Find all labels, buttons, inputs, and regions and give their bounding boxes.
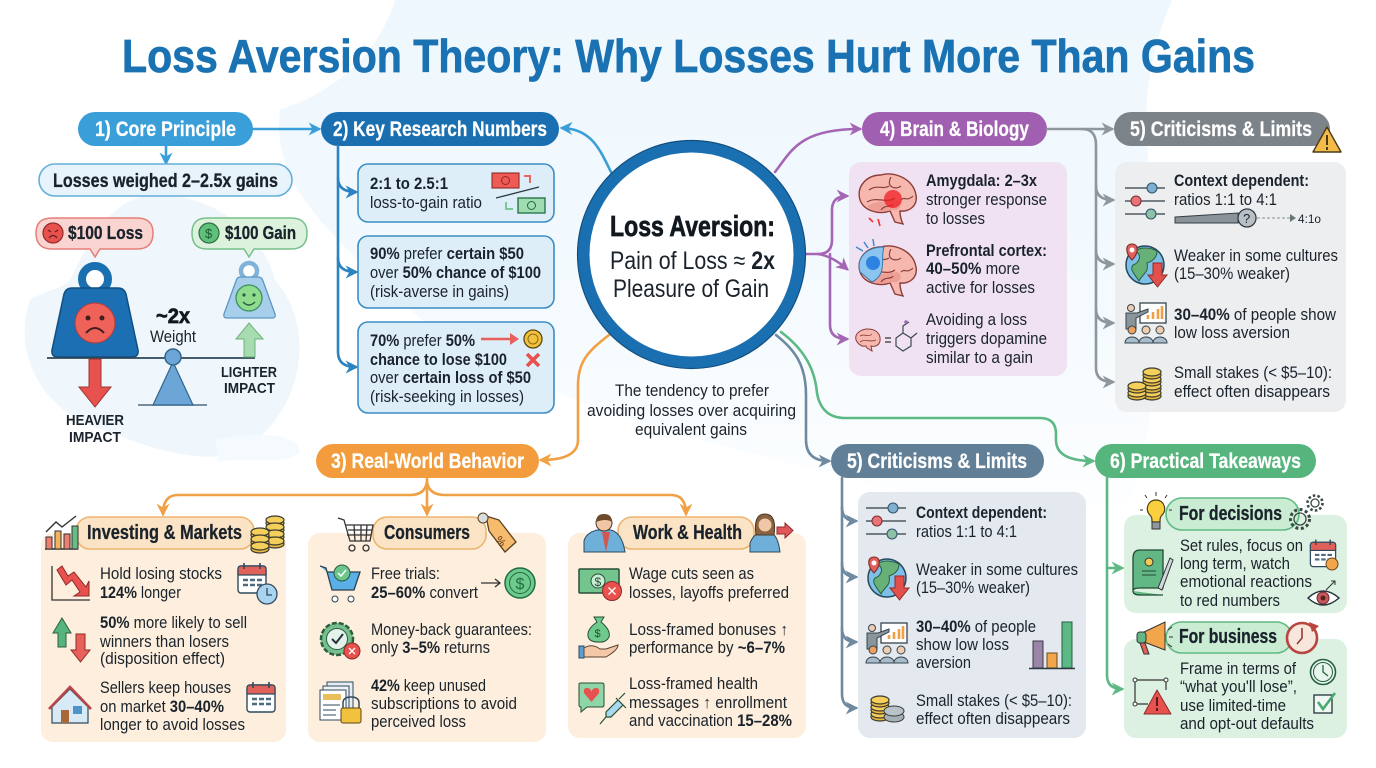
text: heavier impact <box>66 412 124 446</box>
pill: key research numbers: 2) Key Research Numbers <box>333 118 547 141</box>
panel: research box risk-seeking: (risk-seeking in losses) <box>370 388 524 406</box>
panel: investing and markets: (disposition effect) <box>100 650 225 668</box>
panel: investing and markets: on market 30–40% <box>100 698 224 716</box>
panel: research box risk-seeking <box>358 322 554 413</box>
icon: sliders <box>866 503 906 539</box>
icon: stopwatch <box>1287 622 1319 653</box>
panel: criticisms and limits top: effect often disappears <box>1174 383 1330 401</box>
panel: work and health: Loss-framed health <box>629 675 758 693</box>
panel: consumers: Free trials: <box>371 565 440 583</box>
icon: ratio gauge: ? <box>1243 211 1250 226</box>
panel: brain and biology: active for losses <box>926 279 1035 297</box>
icon: brain equals molecule <box>856 320 917 351</box>
panel: brain and biology: stronger response <box>926 191 1047 209</box>
icon: full cart with check <box>320 565 360 602</box>
icon: gears <box>1290 496 1322 528</box>
center circle: loss aversion: Pleasure of Gain <box>613 275 769 303</box>
icon: arrow to dollar coin: $ <box>516 576 524 593</box>
pill: brain and biology <box>862 112 1047 146</box>
panel: investing and markets: 124% longer <box>100 584 181 602</box>
icon: megaphone <box>1137 622 1173 654</box>
sub-heading: work and health <box>618 517 754 549</box>
panel: consumers <box>308 513 546 742</box>
panel: brain and biology: Prefrontal cortex: <box>926 242 1047 260</box>
icon: coins <box>1128 368 1161 400</box>
center circle: loss aversion: Pain of Loss ≈ 2x <box>610 247 775 275</box>
title: Loss Aversion Theory: Why Losses Hurt More Than Gains <box>122 30 1255 82</box>
connectors: research numbers branches <box>338 146 356 367</box>
panel: for business <box>1124 622 1347 738</box>
text: ~2x weight <box>150 305 196 346</box>
connector: core principle to research numbers <box>166 128 611 172</box>
sub-heading: consumers: Consumers <box>384 522 470 544</box>
icon: brain prefrontal <box>856 239 916 296</box>
panel: investing and markets: 50% more likely to sell <box>100 614 247 632</box>
panel: criticisms and limits lower: aversion <box>916 654 971 672</box>
panel: criticisms and limits top: ratios 1:1 to 4:1 <box>1174 191 1277 209</box>
panel: brain and biology: similar to a gain <box>926 349 1033 367</box>
up arrow lighter impact <box>236 323 263 357</box>
callout: losses weighed <box>39 164 292 196</box>
panel: brain and biology: triggers dopamine <box>926 330 1047 348</box>
panel: criticisms and limits top: 30–40% of people show <box>1174 306 1336 324</box>
bubble: $100 loss <box>36 218 153 257</box>
icon: house <box>49 687 91 723</box>
pill: core principle <box>78 112 253 146</box>
icon: shopping cart <box>338 518 373 551</box>
icon: coins <box>871 696 904 722</box>
icon: presenter <box>866 623 908 663</box>
sub-heading: for decisions: For decisions <box>1179 503 1282 525</box>
text: ~2x weight: Weight <box>150 328 196 346</box>
sub-heading: investing <box>76 517 254 549</box>
pill: brain and biology: 4) Brain & Biology <box>880 118 1029 141</box>
connectors: behavior tree <box>163 478 686 514</box>
panel: research box ratio <box>358 164 554 222</box>
bubble: $100 gain: $ <box>205 226 213 241</box>
icon: globe <box>1126 244 1167 287</box>
panel: criticisms and limits lower: effect often disappears <box>916 710 1070 728</box>
center circle: loss aversion: Loss Aversion: <box>610 211 775 243</box>
icon: brain amygdala <box>859 174 916 226</box>
pill: core principle: 1) Core Principle <box>95 118 236 141</box>
panel: consumers: 42% keep unused <box>371 677 486 695</box>
icon: guarantee badge <box>321 623 360 659</box>
icon: light bulb <box>1140 492 1172 529</box>
text: definition: The tendency to prefer <box>615 382 769 400</box>
text: lighter impact <box>221 364 277 397</box>
connectors: center to behavior, criticisms, takeaways <box>541 332 1093 461</box>
panel: for decisions: to red numbers <box>1180 592 1280 610</box>
connectors: criticisms lower branches <box>842 478 856 708</box>
pill: practical takeaways: 6) Practical Takeaways <box>1110 450 1301 473</box>
icon: price tag: % <box>492 534 508 550</box>
icon: price tag <box>478 513 516 552</box>
panel: investing and markets: winners than losers <box>99 633 229 651</box>
bubble: $100 gain <box>192 218 307 257</box>
icon: ratio gauge: 4:1o <box>1298 212 1321 226</box>
callout: losses weighed: Losses weighed 2–2.5x gains <box>53 171 278 192</box>
panel: criticisms and limits lower: Context dependent: <box>916 504 1047 522</box>
pill: criticisms and limits lower: 5) Criticisms & Limits <box>847 450 1027 473</box>
panel: research box ratio: 2:1 to 2.5:1 <box>370 175 448 193</box>
panel: work and health: losses, layoffs preferred <box>629 584 789 602</box>
panel: for decisions: long term, watch <box>1180 555 1290 573</box>
panel: for decisions <box>1124 492 1347 613</box>
panel: brain and biology: Amygdala: 2–3x <box>926 172 1038 190</box>
icon: frame with warning <box>1133 678 1171 714</box>
panel: criticisms and limits top: Weaker in some cultures <box>1174 247 1338 265</box>
bar chart <box>1029 622 1075 668</box>
center circle: loss aversion <box>578 140 806 368</box>
sub-heading: consumers <box>373 517 486 549</box>
bubble: $100 loss: $100 Loss <box>68 223 143 243</box>
panel: investing and markets: Sellers keep houses <box>100 679 231 697</box>
panel: consumers: perceived loss <box>371 713 466 731</box>
text: definition: avoiding losses over acquiring <box>587 402 796 420</box>
panel: investing and markets <box>41 516 286 742</box>
panel: criticisms and limits lower: Small stakes (< $5–10): <box>916 692 1072 710</box>
icon: health message and syringe <box>579 683 626 724</box>
bubble: $100 gain: $100 Gain <box>225 223 296 243</box>
panel: brain and biology: 40–50% more <box>926 260 1020 278</box>
icon: ratio gauge <box>1175 209 1321 227</box>
pill: real-world behavior <box>316 444 539 478</box>
icon: money bag on hand <box>579 617 618 658</box>
pill: criticisms and limits top <box>1114 112 1341 152</box>
panel: consumers: subscriptions to avoid <box>371 695 517 713</box>
panel: work and health <box>568 514 806 738</box>
icon: money bag on hand: $ <box>594 628 601 640</box>
icon: globe <box>868 557 909 600</box>
panel: investing and markets: longer to avoid losses <box>100 716 245 734</box>
icon: balance scale with weights <box>47 263 277 446</box>
text: heavier impact: IMPACT <box>69 429 121 446</box>
panel: criticisms and limits lower: Weaker in some cultures <box>916 561 1078 579</box>
pill: real-world behavior: 3) Real-World Behavior <box>331 450 524 473</box>
panel: research box risk-seeking: over certain loss of $50 <box>370 369 531 387</box>
panel: for business: “what you'll lose”, <box>1180 678 1297 696</box>
beam and pivot <box>47 349 255 405</box>
panel: investing and markets: Hold losing stocks <box>100 565 222 583</box>
panel: research box certain gains: over 50% chance of $100 <box>370 264 541 282</box>
text: definition: equivalent gains <box>635 421 747 439</box>
panel: for business: Frame in terms of <box>1180 660 1296 678</box>
pill: practical takeaways <box>1095 444 1316 478</box>
text: ~2x weight: ~2x <box>156 305 190 328</box>
icon: arrow to dollar coin <box>481 568 535 598</box>
connectors: center to brain <box>775 129 860 339</box>
pill: criticisms and limits top: 5) Criticisms & Limits <box>1130 118 1312 141</box>
text: lighter impact: IMPACT <box>224 380 275 397</box>
icon: up and down arrows <box>53 618 90 662</box>
panel: for business: and opt-out defaults <box>1180 715 1314 733</box>
icon: falling chart <box>52 566 90 600</box>
icon: arrow, coin and cross <box>481 330 542 366</box>
panel: work and health: performance by ~6–7% <box>629 639 785 657</box>
panel: criticisms and limits top: Small stakes (< $5–10): <box>1174 364 1332 382</box>
down arrow heavier impact <box>79 359 111 407</box>
sub-heading: for decisions <box>1166 498 1299 530</box>
sub-heading: for business <box>1166 622 1292 653</box>
icon: calendar and clock <box>1310 540 1338 570</box>
text: definition <box>587 382 796 439</box>
panel: for decisions: Set rules, focus on <box>1180 537 1303 555</box>
panel: research box ratio: loss-to-gain ratio <box>370 194 482 212</box>
panel: work and health: and vaccination 15–28% <box>629 712 792 730</box>
panel: criticisms and limits lower <box>858 492 1086 738</box>
panel: criticisms and limits top: Context dependent: <box>1174 172 1309 190</box>
pill: criticisms and limits lower <box>831 444 1044 478</box>
panel: criticisms and limits top: low loss aversion <box>1174 324 1290 342</box>
panel: criticisms and limits lower: (15–30% weaker) <box>916 579 1030 597</box>
icon: woman with arrow <box>750 514 793 552</box>
text: heavier impact: HEAVIER <box>66 412 124 429</box>
icon: banknote with cross: $ <box>594 575 602 589</box>
connectors: takeaways branches <box>1107 478 1122 689</box>
icon: sliders <box>1125 183 1165 219</box>
sub-heading: investing: Investing & Markets <box>87 522 242 544</box>
panel: consumers: Money-back guarantees: <box>371 621 532 639</box>
icon: warning triangle <box>1313 127 1341 152</box>
icon: businessman <box>584 514 625 552</box>
icon: calendar with clock <box>238 563 277 604</box>
panel: criticisms and limits lower: 30–40% of people <box>916 618 1036 636</box>
heavy weight with sad face <box>52 266 138 357</box>
icon: documents with lock <box>320 682 361 723</box>
panel: for decisions: emotional reactions <box>1180 573 1312 591</box>
panel: brain and biology <box>849 162 1067 376</box>
panel: for business: use limited-time <box>1180 697 1286 715</box>
icon: banknote with cross <box>579 569 622 600</box>
pill: key research numbers <box>321 112 559 146</box>
panel: research box risk-seeking: chance to lose $100 <box>370 351 507 369</box>
icon: presenter <box>1125 303 1167 343</box>
icon: calendar <box>247 682 275 712</box>
icon: notebook and pen <box>1133 550 1173 595</box>
panel: research box certain gains <box>358 236 554 308</box>
panel: research box certain gains: (risk-averse in gains) <box>370 283 509 301</box>
icon: eye <box>1308 581 1339 605</box>
icon: money ratio <box>492 173 545 213</box>
panel: work and health: messages ↑ enrollment <box>629 694 787 712</box>
text: lighter impact: LIGHTER <box>221 364 277 381</box>
panel: criticisms and limits top <box>1115 162 1346 412</box>
panel: consumers: only 3–5% returns <box>371 639 490 657</box>
panel: criticisms and limits lower: show low loss <box>916 636 1009 654</box>
sub-heading: work and health: Work & Health <box>633 522 742 544</box>
connectors: brain to criticisms top <box>1047 129 1113 382</box>
panel: brain and biology: to losses <box>926 210 985 228</box>
panel: work and health: Wage cuts seen as <box>629 565 754 583</box>
icon: checkbox <box>1314 693 1335 713</box>
panel: criticisms and limits lower: ratios 1:1 to 4:1 <box>916 523 1017 541</box>
panel: research box risk-seeking: 70% prefer 50% <box>370 332 475 350</box>
sub-heading: for business: For business <box>1179 626 1277 648</box>
panel: brain and biology: Avoiding a loss <box>926 311 1027 329</box>
icon: clock <box>1310 660 1336 684</box>
light weight with happy face <box>224 263 275 318</box>
panel: criticisms and limits top: (15–30% weaker) <box>1174 265 1290 283</box>
icon: growth chart <box>45 516 78 549</box>
panel: work and health: Loss-framed bonuses ↑ <box>629 621 788 639</box>
panel: consumers: 25–60% convert <box>371 584 478 602</box>
icon: coin stack <box>251 516 284 553</box>
panel: research box certain gains: 90% prefer certain $50 <box>370 245 524 263</box>
